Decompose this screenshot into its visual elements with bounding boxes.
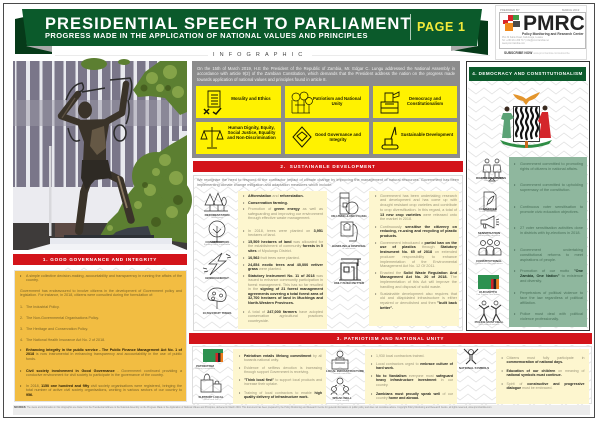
- icon: megaphone: [480, 215, 500, 229]
- section heading: 1 good governance: [13, 254, 187, 265]
- icon: handshake diamond: [292, 126, 312, 148]
- label: local contractors: Trained contractors: [333, 373, 351, 375]
- icon: construction worker with plan: [330, 350, 350, 370]
- bullet: Police must deal with political violence professionally.: [520, 312, 583, 321]
- list item 1: 1. The Industrial Policy.: [20, 304, 60, 308]
- heading: democracy: [469, 67, 586, 81]
- panel: good governance text: •: [20, 274, 21, 278]
- section heading: 3 patriotism: [189, 333, 592, 344]
- list item 2: 2. The Non-Governmental Organisations Policy.: [20, 316, 99, 320]
- bullet: Government has been undertaking research and development and has come up with drought resistant crop varieties and contribute to crop diversification. In this regard, a total of 13 new crop varieties were released onto the market in 2018.: [380, 194, 457, 221]
- card: patriotism and national unity: [285, 86, 369, 118]
- bullet: 10,562 fruit trees were planted.: [248, 256, 300, 260]
- bullet: Conservation farming.: [248, 201, 288, 205]
- icon: reforestation: [204, 192, 228, 212]
- label: police: With political violence: [479, 324, 499, 326]
- bullet: Education of our children on meaning of national symbols must continue.: [506, 368, 584, 377]
- bullet: "Think local first" to support local products and increase their uptake.: [244, 378, 322, 386]
- column: icons left: [202, 192, 232, 315]
- label: recycling: RE-USING & RECYCLING: [331, 214, 367, 218]
- icon: recycling bottle: [340, 192, 358, 214]
- footnote: SOURCES: The views and information in this infographic are drawn from the Presidential Address to the National Assembly on the Progress Made in the Application of National Values and Principles, delivered in March 2019. This document has been prepared by the Policy Monitoring and Research Centre for general information on public policy and does not constitute advice. Copyright Policy Monitoring and Research Centre, all rights reserved, www.pmrczambia.com: [14, 406, 491, 408]
- label: sensitisation: [478, 231, 500, 237]
- icon: scales of justice: [200, 127, 224, 148]
- contact lines: [502, 36, 549, 45]
- panel: forestry measures: [238, 191, 327, 329]
- card: democracy and constitutionalism: [373, 86, 457, 118]
- label: speak well: SPEAK WELL: [332, 396, 352, 400]
- label: support local: [193, 394, 229, 402]
- column: rights icons: [474, 158, 506, 326]
- icon: digger: [382, 126, 398, 150]
- column: icons right: [331, 192, 367, 285]
- bullet: Continuous voter sensitisation to promote civic education objectives.: [520, 205, 583, 214]
- label: sensitisation: Countrywide education: [478, 235, 500, 237]
- label: constitutional: [475, 259, 503, 265]
- label: patriotism: PATRIOTISM: [196, 364, 214, 368]
- contact lines: Tel: +260 211 269 717 | info@pmrczambia.net: [502, 40, 549, 42]
- label: Human Dignity, Equity, Social Justice, Equality and Non-Discrimination: [227, 124, 276, 140]
- label: sensitisation: SENSITISATION: [478, 231, 500, 235]
- section heading: 1 good governance: 1. GOOD GOVERNANCE AND INTEGRITY: [43, 257, 157, 262]
- logo strapline: Policy Monitoring and Research Center: [522, 32, 584, 36]
- panel: democracy and constitutionalism: [466, 61, 590, 331]
- label: support local: SUPPORT LOCAL: [198, 394, 224, 398]
- panel: national values overview: [192, 61, 460, 158]
- label: Good Governance and Integrity: [315, 132, 361, 142]
- icon: group of people: [478, 239, 502, 256]
- logo wordmark: PMRC: [523, 12, 585, 35]
- icon: conservation: [208, 220, 226, 242]
- bullet: 15,509 hectares of land was allocated for the establishment of community forests in 5 sites of Mpulungu District.: [248, 240, 323, 252]
- icon: Zambia coat of arms: [500, 92, 552, 148]
- panel: waste and research measures: [369, 191, 459, 326]
- panel: PMRC logo box: [495, 5, 587, 60]
- label: Democracy and Constitutionalism: [407, 96, 443, 106]
- date: MARCH 2019: [562, 8, 579, 12]
- trees: [81, 58, 192, 243]
- bullet: Government committed to promoting rights of citizens in national affairs.: [520, 162, 583, 171]
- bullet: Enacted the Solid Waste Regulation And Management Act No. 20 of 2018. The implementation of this Act will improve the handling and disposal of solid waste.: [380, 270, 457, 289]
- icon: crane and building: [339, 258, 361, 280]
- section heading: 2 sustainable development: [193, 161, 463, 172]
- panel: sustainable development: [193, 175, 463, 331]
- panel: patriotism list: [233, 348, 326, 404]
- footnote: [13, 405, 590, 415]
- label: handling: [332, 244, 366, 250]
- bullet: Spirit of constructive and progressive dialogue must be embraced.: [506, 382, 584, 390]
- bullet: Promotion of green energy as well as safeguarding and improving our environment through effective waste management.: [248, 207, 323, 220]
- bullet: Training of local contractors to enable high quality delivery of infrastructure work.: [244, 390, 322, 399]
- label: rights of citizens: National affairs: [484, 180, 498, 182]
- label: reforestation: Urban forest: [211, 217, 223, 219]
- bullet: Citizens must fully participate in commemoration of national days.: [506, 356, 584, 364]
- bullet: A total of 247,000 farmers have adopted conservation agricultural practices countrywide.: [248, 310, 323, 322]
- header banner: [15, 9, 490, 56]
- label: our motto: OUR MOTTO: [479, 290, 497, 294]
- label: rights of citizens: RIGHTS OF CITIZENS: [476, 176, 506, 180]
- bullet: Local contractors urged to embrace culture of hard work.: [376, 362, 453, 370]
- bullet: In 2018, trees were planted on 3,951 hectares of land.: [248, 228, 323, 237]
- subtitle: PROGRESS MADE IN THE APPLICATION OF NATIONAL VALUES AND PRINCIPLES: [45, 31, 368, 40]
- label: patriotism: Lifelong commitment: [195, 368, 215, 370]
- icon: equal rights scale: [481, 158, 503, 182]
- label: police: [469, 320, 509, 327]
- card: sustainable development: [373, 122, 457, 154]
- prepared by: PREPARED BY: [500, 8, 520, 12]
- bullet: Perpetrators of political violence to face the law regardless of political affiliation.: [520, 291, 583, 305]
- intro paragraph: On the 15th of March 2019, H.E the President of the Republic of Zambia, Mr. Edgar C. Lungu addressed the National Assembly in accordance with article 9(2) of the Zambian Constitution, which demands that the President address the nation on the progress made towards application of national values and principles found in article 8.: [197, 66, 455, 82]
- heading: democracy: 4. DEMOCRACY AND CONSTITUTIONALISM: [472, 71, 583, 76]
- label: national symbols: NATIONAL SYMBOLS: [459, 366, 489, 370]
- bullet: Government committed to upholding supremacy of the constitution.: [520, 183, 583, 192]
- logo card: [499, 12, 586, 49]
- photo: freedom statue in front of building: [13, 58, 192, 250]
- bullet: Government undertaking constitutional reforms to meet aspirations of people.: [520, 248, 583, 262]
- bullet: Government introduced a partial ban on the use of plastics through Statutory Instrument No. 65 of 2018 on extended producer responsibility to enhance implementation of the Environmental Management Act No. 12 Of 2011.: [380, 240, 457, 268]
- card: good governance and integrity: [285, 122, 369, 154]
- bullet: Patriotism entails lifelong commitment by all towards national unity.: [244, 354, 322, 362]
- bullet: Zambians must proudly speak well of our country home and abroad.: [376, 392, 453, 400]
- label: green energy: GREEN ENERGY: [205, 276, 229, 280]
- label: local contractors: [326, 369, 358, 376]
- bullet: registered organisations: In 2018, 1150 one hundred and fifty civil society organisations were registered, bringing the total number of active civil society organisations, working in various sectors of our country to 956.: [26, 384, 182, 397]
- bullet: collective decision-making: A simple collective decision-making, accountability and transparency in running the affairs of the country.: [26, 274, 182, 282]
- section heading: 2 sustainable development: 2. SUSTAINABLE DEVELOPMENT: [280, 164, 376, 169]
- label: constitutional: Reforms to meet aspirations: [475, 263, 503, 265]
- icon: document and quill: [484, 192, 496, 210]
- panel: good governance text: [15, 271, 186, 401]
- icon: document with cross and tick: [204, 90, 222, 115]
- icon: two figures fighting: [478, 300, 502, 322]
- bullet: 1,930 local contractors trained.: [376, 354, 425, 358]
- icon: logo squares: [503, 15, 520, 31]
- panel: good governance text: •: [20, 348, 21, 352]
- label: handling: HANDLING & DISPOSAL: [332, 244, 366, 248]
- panel: patriotism and national unity: [192, 346, 592, 404]
- contact lines: Plot 32 Sable Road, Kabulonga, Lusaka: [502, 37, 543, 39]
- panel: contractors list: [365, 348, 457, 404]
- icon: waste disposal: [340, 222, 358, 242]
- label: reforestation: REFORESTATION: [205, 213, 229, 217]
- label: Sustainable Development: [401, 132, 453, 137]
- intro text: We recognise the need to respond to the contractor impact of climate change by improving the management of natural resources. Government has been implementing climate change mitigation and adaptation measures which include:: [197, 178, 459, 187]
- label: our motto: One Zambia One Nation: [476, 294, 500, 296]
- bullet: Statutory Instrument No. 11 of 2018 was issued to enhance community participation in forest management. This has so far resulted in the signing of 21 forest management agreements covering a total forest area of 32,700 hectares of land in Muchinga and North-Western Provinces.: [248, 274, 323, 304]
- panel: national symbols list: [496, 348, 588, 404]
- label: conservation: [204, 240, 230, 246]
- card: human dignity: [196, 122, 281, 154]
- bullet: civil society: Civil society involvement in Good Governance - Government continued providing a conducive environment for civil society to participate in the governance of the country.: [26, 368, 182, 377]
- label: committed: [479, 207, 497, 213]
- title: PRESIDENTIAL SPEECH TO PARLIAMENT: [45, 15, 412, 33]
- page number: PAGE 1: [417, 20, 466, 34]
- icon: shopping bags: [200, 373, 222, 393]
- label: speak well: [326, 396, 358, 402]
- list item 3: 3. The Heritage and Conservation Policy.: [20, 326, 88, 330]
- label: reforestation: [204, 213, 230, 219]
- icon: people speaking: [330, 377, 350, 396]
- bullet: Sustainable development also requires that old and dilapidated infrastructure is either repaired or demolished and then "built back better".: [380, 292, 457, 310]
- icon: Zambia flag: [203, 348, 223, 362]
- bullet: 24,854 exotic trees and 40,000 vetiver grass were planted.: [248, 262, 323, 271]
- bullet: Afforestation and reforestation.: [248, 194, 304, 198]
- label: handling: of solid waste: [342, 248, 356, 250]
- icon: fruit tree: [208, 288, 226, 309]
- section heading: 3 patriotism: 3. PATRIOTISM AND NATIONAL UNITY: [337, 336, 444, 341]
- label: our motto: [476, 290, 500, 296]
- bullet: 27 voter sensitisation activities done in districts with by-elections in 2018.: [520, 226, 583, 235]
- icon: ballot box: [380, 91, 400, 114]
- bullet: enhancing integrity: Enhancing integrity in the public service - The Public Finance Management Act No. 1 of 2018 is now instrumental in enhancing transparency and accountability in the use of public funds.: [26, 348, 182, 361]
- panel: good governance text: •: [20, 384, 21, 388]
- label: fruit trees: 10,562 FRUIT TREES: [203, 311, 231, 315]
- label: Morality and Ethics: [231, 96, 271, 101]
- icon: Zambia flag: [478, 275, 499, 289]
- infographic label: INFOGRAPHIC: [213, 52, 307, 58]
- label: patriotism: [190, 364, 220, 371]
- bullet: No to Vandalism everyone must safeguard heavy infrastructure investment in our country.: [376, 374, 453, 387]
- subscribe now: SUBSCRIBE NOW www.pmrczambia.com/subscribe: [504, 51, 570, 55]
- label: local contractors: LOCAL INFRASTRUCTURE: [326, 369, 364, 373]
- label: conservation: CONSERVATION: [205, 240, 229, 244]
- label: conservation: Farming that is sustainable: [204, 244, 230, 246]
- statue: [61, 84, 131, 231]
- panel: democracy text: [509, 157, 587, 327]
- panel: good governance text: •: [20, 368, 21, 372]
- label: police: POLICE MUST DEAL: [475, 320, 503, 324]
- icon: group of flags: [292, 92, 313, 114]
- rock: [104, 226, 153, 243]
- label: committed: To the constitution: [479, 211, 497, 213]
- list item 4: 4. The National Health Insurance Act No. 2 of 2018.: [20, 338, 105, 342]
- bullet: Evidence of selfless devotion is increasing through support Government is receiving.: [244, 366, 322, 374]
- label: constitutional: CONSTITUTIONAL: [476, 259, 502, 263]
- label: Patriotism and National Unity: [313, 96, 361, 106]
- label: rights of citizens: [476, 176, 506, 182]
- icon: national symbols figures: [463, 348, 479, 365]
- icon: green energy bolt: [202, 252, 232, 276]
- card: morality and ethics: [196, 86, 281, 118]
- contact lines: www.pmrczambia.com: [502, 43, 525, 45]
- bullet: Promotion of our motto "One Zambia, One Nation" to existence and diversity.: [520, 269, 583, 283]
- bullet: Continuously sensitise the citizenry on reducing, re-using and recycling of plastic products.: [380, 224, 457, 238]
- label: build back better: ONLY BUILD BETTER: [334, 281, 364, 285]
- paragraph: citizens consulted: Government has endeavoured to involve citizens in the development of Government policy and legislation. For instance, in 2018, citizens were consulted during the formulation of:: [20, 288, 182, 297]
- label: support local: Think local first: [204, 398, 218, 400]
- label: speak well: Of our country: [335, 400, 349, 402]
- label: committed: COMMITTED: [479, 207, 497, 211]
